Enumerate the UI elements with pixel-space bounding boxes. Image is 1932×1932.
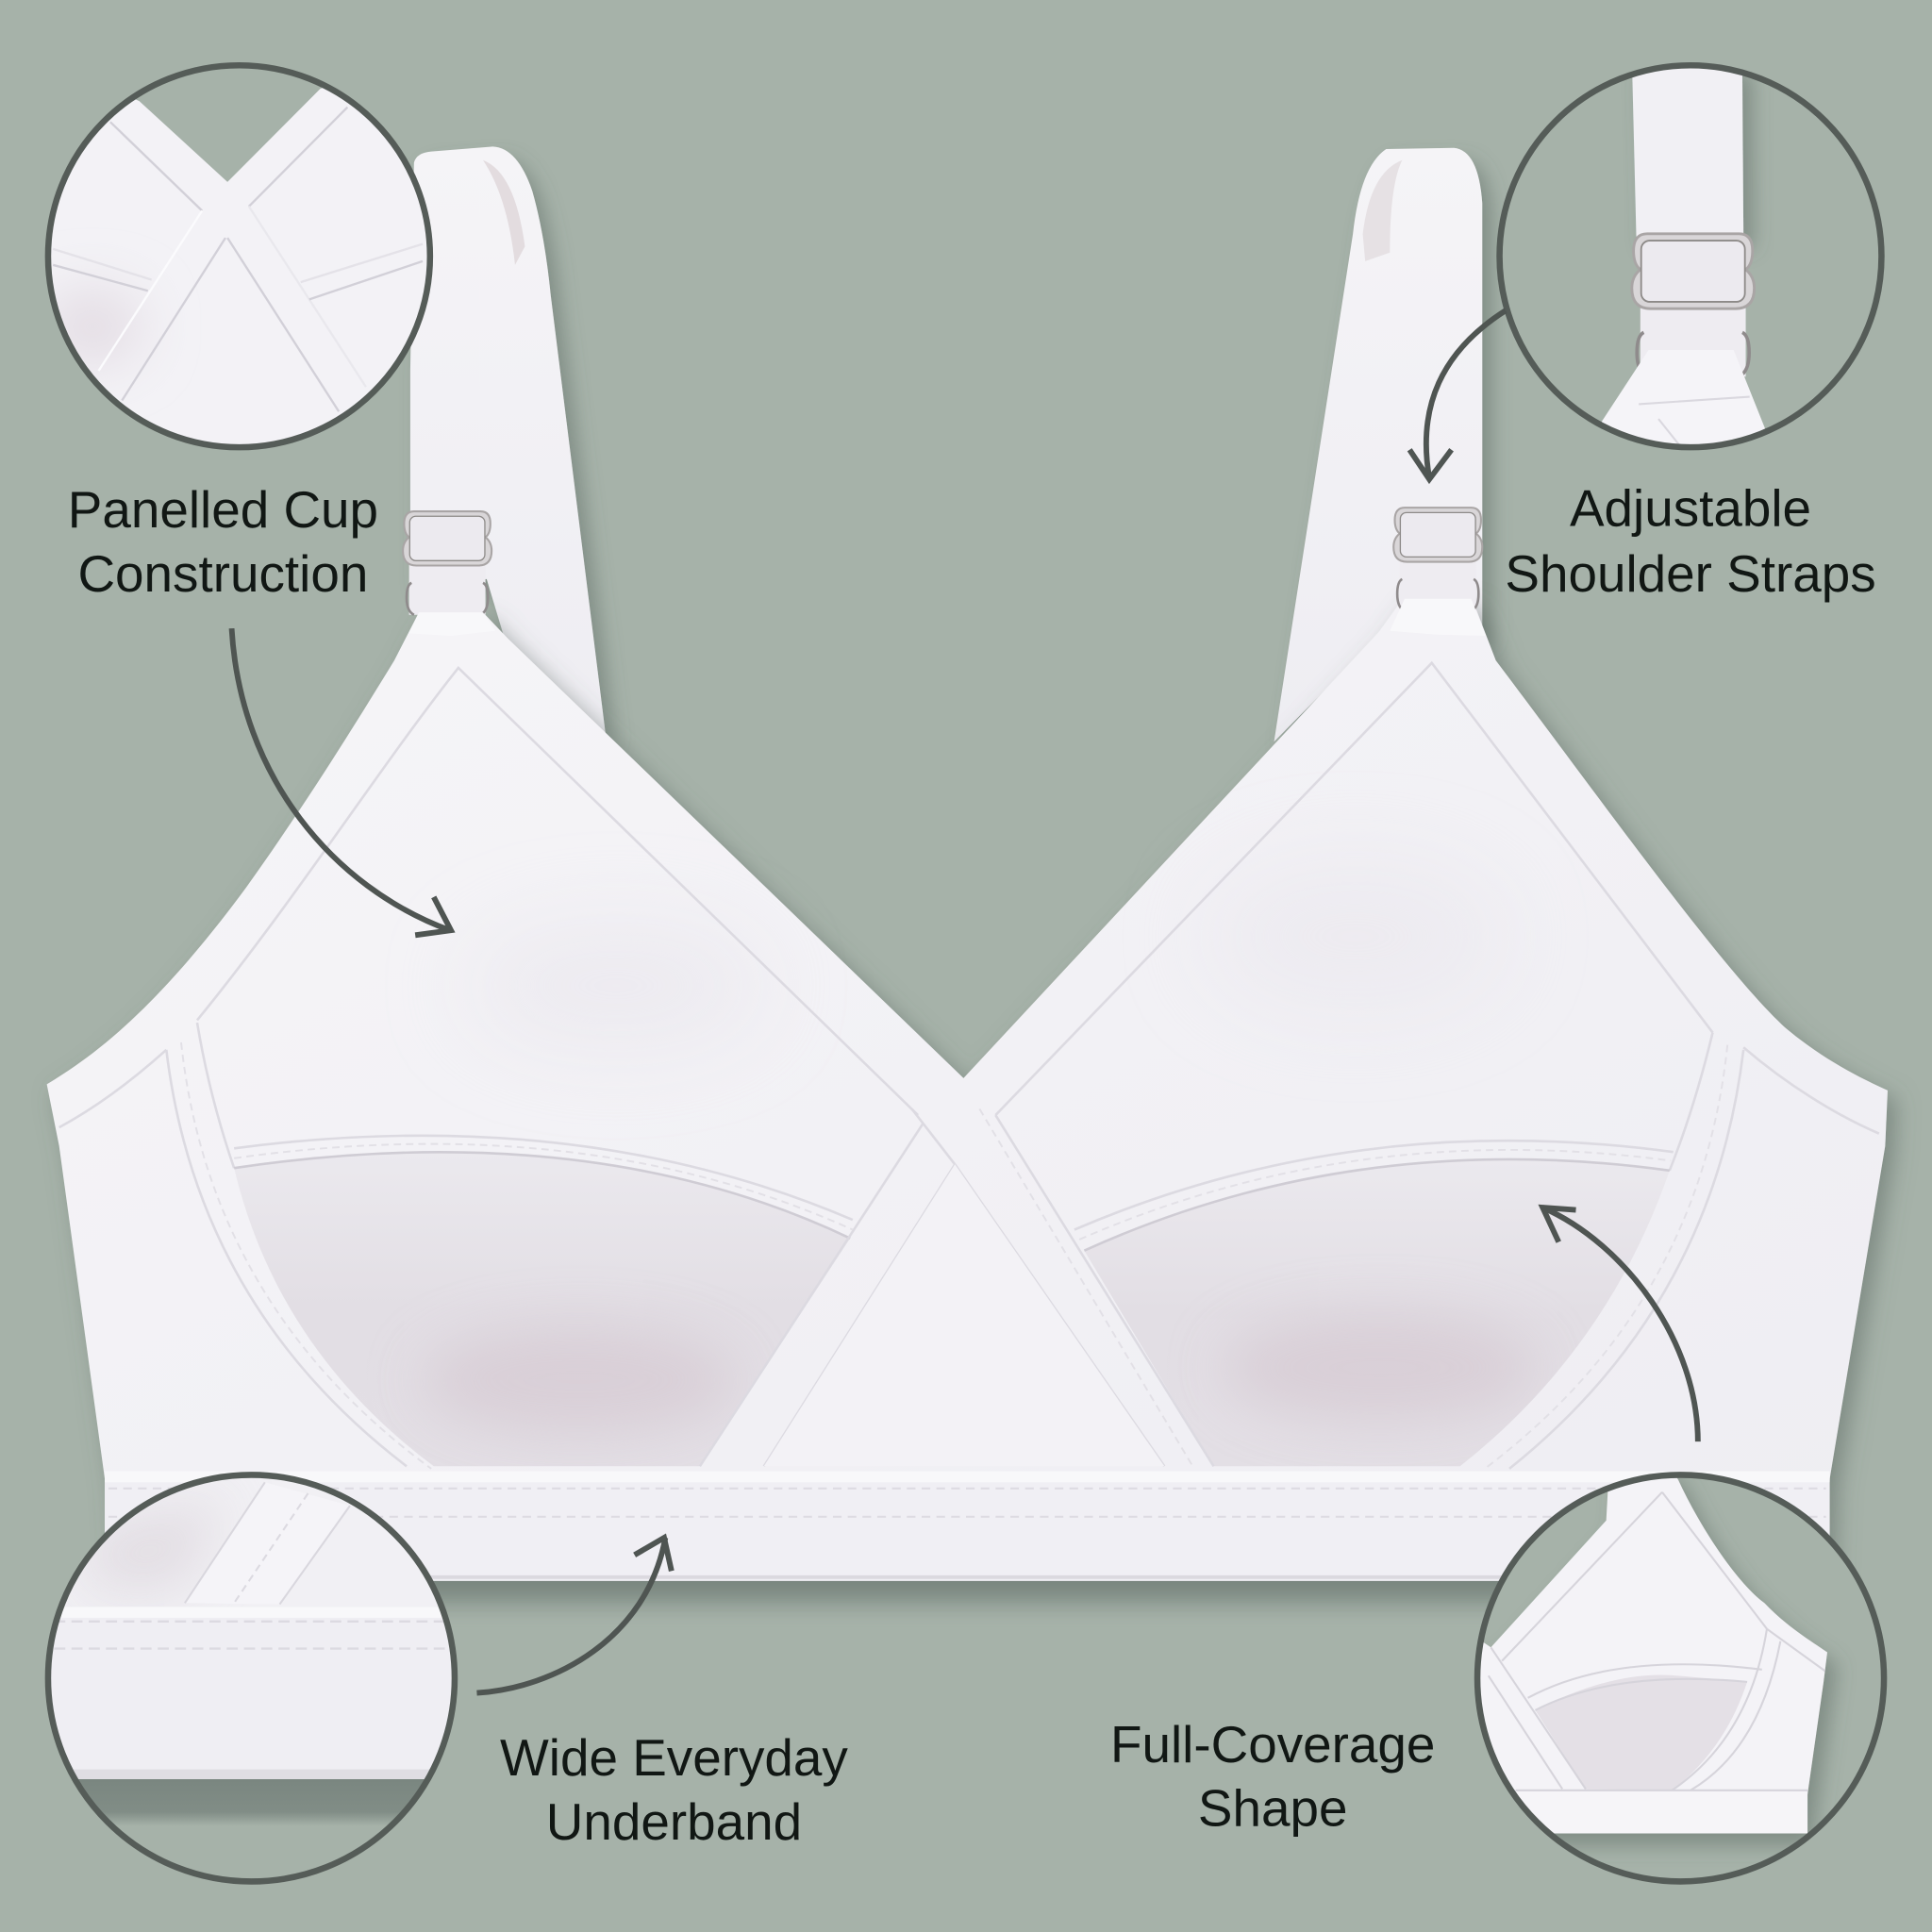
bra body: [47, 596, 1888, 1581]
arrow: underband: [476, 1538, 672, 1693]
label: wide everyday underband: Underband: [546, 1792, 802, 1851]
label: adjustable shoulder straps: Adjustable: [1570, 479, 1811, 538]
label: full-coverage shape: Full-Coverage: [1110, 1715, 1435, 1774]
cup and tape seams: [59, 663, 1879, 1469]
detail circle: adjustable straps: [1500, 61, 1881, 456]
label: adjustable shoulder straps: [1505, 479, 1876, 603]
right lower cup: [1084, 1159, 1670, 1466]
detail circle: full coverage: [1466, 1466, 1884, 1881]
left strap tab: [409, 612, 495, 636]
label: adjustable shoulder straps: Shoulder Straps: [1505, 544, 1876, 603]
band: [105, 1472, 1830, 1581]
label: panelled cup construction: Construction: [77, 544, 368, 603]
label: wide everyday underband: Wide Everyday: [500, 1728, 848, 1787]
detail circle: underband: [37, 1466, 468, 1881]
arrow: adjustable straps: [1409, 310, 1506, 479]
label: full-coverage shape: Shape: [1198, 1779, 1348, 1838]
label: full-coverage shape: [1110, 1715, 1435, 1838]
arrow: full coverage: [1542, 1208, 1698, 1441]
right strap adjuster: [1393, 508, 1482, 611]
bra garment: [47, 146, 1888, 1607]
label: wide everyday underband: [500, 1728, 848, 1851]
right shoulder strap: [1274, 148, 1482, 741]
band shadow: [111, 1574, 1830, 1607]
label: panelled cup construction: [68, 480, 378, 603]
detail circle: panelled cup: [45, 62, 434, 451]
right strap tab: [1390, 599, 1486, 636]
tape stitching: [181, 1042, 1727, 1469]
arrow: panelled cup: [232, 628, 451, 935]
left strap adjuster: [403, 511, 491, 615]
left shoulder strap: [410, 146, 607, 740]
cup soft shading: [468, 862, 1503, 1047]
label: panelled cup construction: Panelled Cup: [68, 480, 378, 539]
centre triangle: [764, 1164, 1164, 1466]
left lower cup: [234, 1152, 850, 1466]
